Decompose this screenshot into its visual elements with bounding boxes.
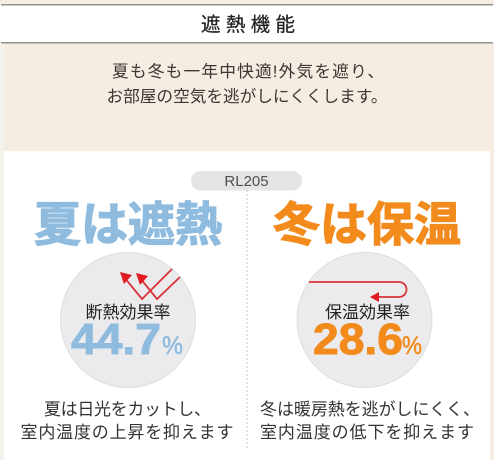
intro text <box>106 62 388 106</box>
intro text: お部屋の空気を逃がしにくくします。 <box>106 87 388 106</box>
retention label: 保温効果率 <box>325 303 410 322</box>
summer circle <box>60 252 196 388</box>
icon: reflected heat arrows <box>120 269 180 299</box>
summer description: 室内温度の上昇を抑えます <box>20 423 234 442</box>
intro text: 夏も冬も一年中快適!外気を遮り、 <box>112 62 384 81</box>
insulation value: 44.7 <box>71 315 161 364</box>
winter description: 室内温度の低下を抑えます <box>260 423 474 442</box>
winter circle <box>297 252 432 388</box>
white content panel <box>4 151 490 460</box>
title band <box>0 4 494 44</box>
panel: winter <box>260 198 480 442</box>
retention value: 28.6 <box>313 315 403 364</box>
model pill: RL205 <box>224 173 269 190</box>
retention value: % <box>402 332 422 360</box>
icon: retained heat arrow <box>309 282 407 302</box>
winter heading: 冬は保温 <box>273 198 461 251</box>
title: 遮熱機能 <box>201 14 295 36</box>
insulation label: 断熱効果率 <box>86 303 170 322</box>
summer description <box>20 400 234 442</box>
winter description <box>260 400 480 442</box>
summer description: 夏は日光をカットし、 <box>44 400 211 419</box>
model pill <box>191 171 302 190</box>
insulation value: % <box>162 332 183 360</box>
winter description: 冬は暖房熱を逃がしにくく、 <box>260 400 480 419</box>
summer heading: 夏は遮熱 <box>34 198 222 251</box>
panel: summer <box>20 198 234 442</box>
